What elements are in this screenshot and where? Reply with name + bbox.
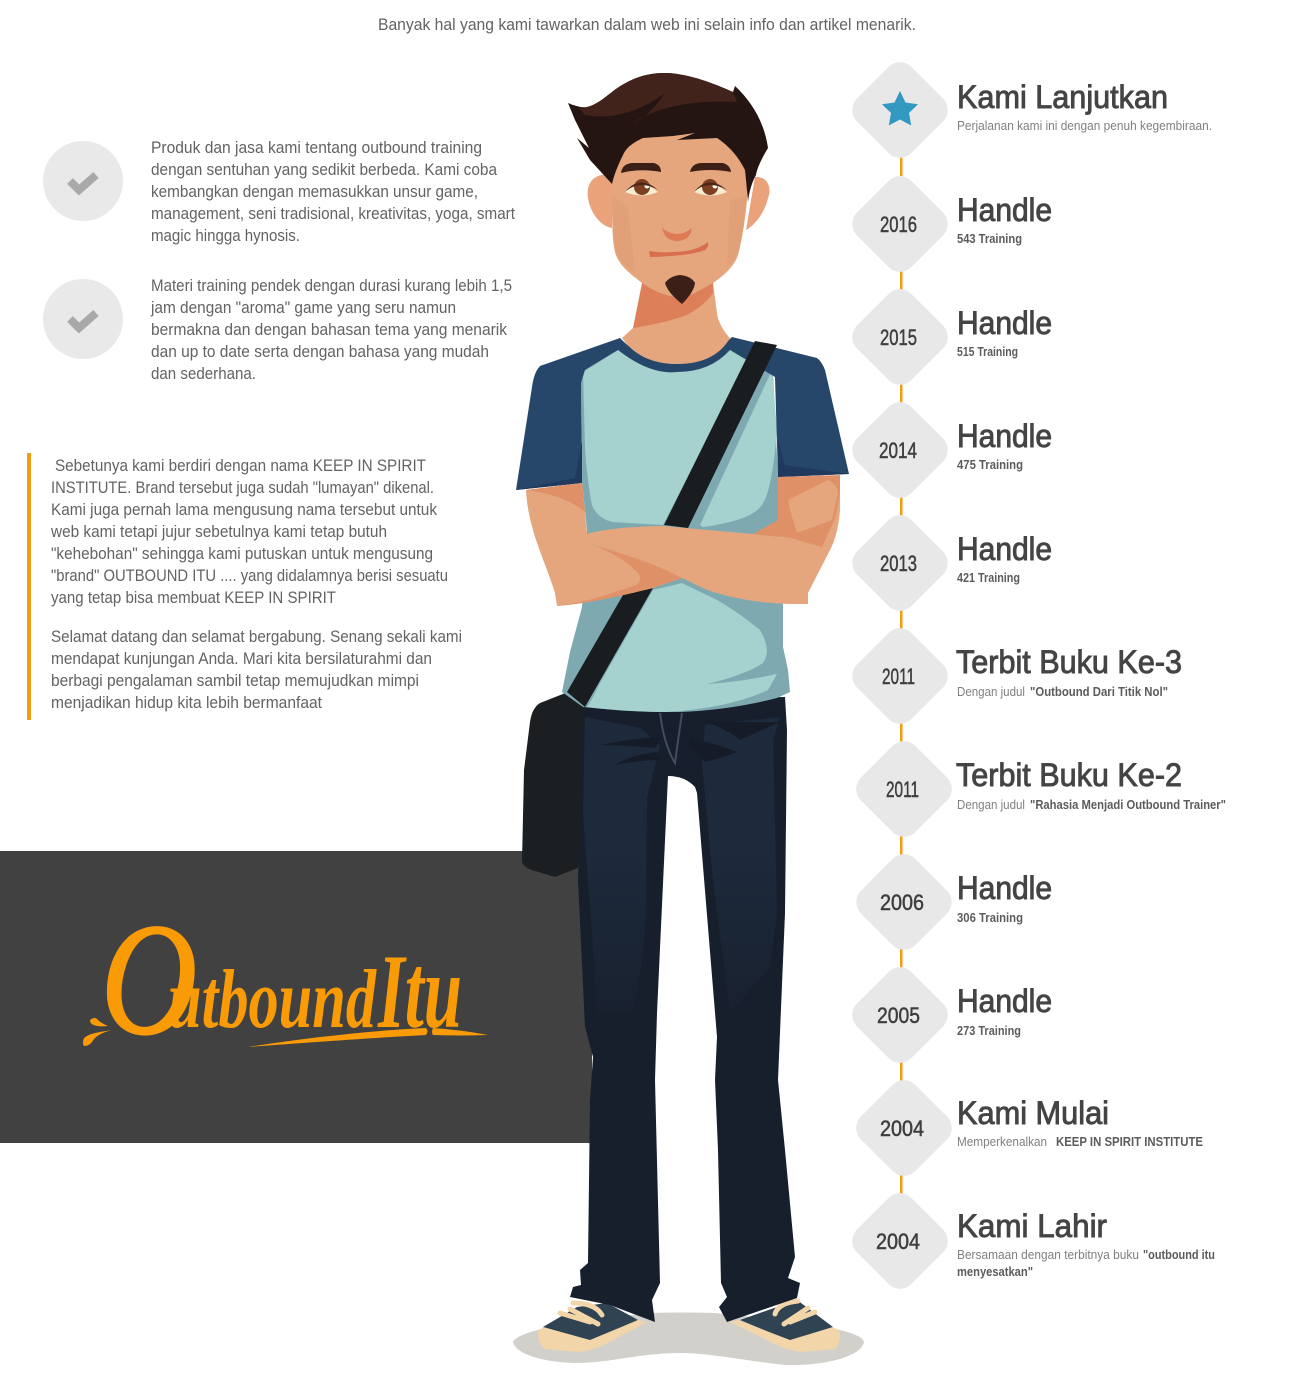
subtitle [957, 1134, 1203, 1149]
text block: history: Sebetunya kami berdiri dengan nama KEEP IN SPIRIT [55, 456, 426, 475]
logo: Outbound Itu: O [101, 890, 197, 1068]
title: Terbit Buku Ke-2 [956, 757, 1182, 793]
goatee [665, 275, 695, 304]
subtitle: menyesatkan" [957, 1265, 1033, 1279]
diamond: year 2004: 2004 [876, 1229, 920, 1254]
panel: about quote [27, 453, 462, 720]
title: Handle [957, 870, 1052, 906]
text block: history: Kami juga pernah lama mengusung nama tersebut untuk [51, 500, 437, 519]
diamond: year 2006 [850, 848, 958, 956]
title: Handle [957, 192, 1052, 228]
subtitle: KEEP IN SPIRIT INSTITUTE [1056, 1135, 1203, 1149]
panel: second service point [43, 276, 512, 383]
timeline item: Terbit Buku Ke-2 [850, 735, 1226, 843]
diamond: year 2013 [846, 509, 954, 617]
subtitle: 475 Training [957, 458, 1023, 472]
text block: product description: Produk dan jasa kami tentang outbound training [151, 138, 482, 157]
text block: welcome: berbagi pengalaman sambil tetap memujudkan mimpi [51, 671, 419, 690]
diamond: year 2014 [846, 396, 954, 504]
subtitle: 306 Training [957, 911, 1023, 925]
diamond: year 2005 [846, 961, 954, 1069]
text block: product description [151, 138, 515, 245]
jeans [570, 697, 800, 1322]
subtitle [957, 1247, 1215, 1279]
subtitle [957, 797, 1226, 812]
icon: check badge 1 [43, 141, 123, 221]
timeline item: Kami Lahir [846, 1187, 1215, 1295]
diamond: year 2006: 2006 [880, 890, 924, 915]
title: Kami Lanjutkan [957, 79, 1168, 115]
text block: welcome: menjadikan hidup kita lebih bermanfaat [51, 693, 322, 712]
text block: welcome [51, 627, 462, 712]
timeline item: 2015 [846, 283, 1052, 391]
illustration: standing man [513, 73, 864, 1365]
orange quote bar [27, 453, 31, 720]
timeline item: Kami Mulai [850, 1074, 1203, 1182]
diamond: year 2015 [846, 283, 954, 391]
ears [588, 175, 769, 230]
subtitle: 273 Training [957, 1024, 1021, 1038]
text block: training description: Materi training pendek dengan durasi kurang lebih 1,5 [151, 276, 512, 295]
title: Kami Lahir [957, 1208, 1107, 1244]
text block: history: web kami tetapi jujur sebetulnya kami tetap butuh [50, 522, 387, 541]
text block: history: "brand" OUTBOUND ITU .... yang didalamnya berisi sesuatu [51, 566, 448, 585]
subtitle: 421 Training [957, 571, 1020, 585]
face [612, 125, 747, 304]
icon: check badge 2 [43, 279, 123, 359]
text block: welcome: mendapat kunjungan Anda. Mari kita bersilaturahmi dan [51, 649, 432, 668]
shoes [538, 1300, 840, 1352]
text block: history [50, 456, 448, 607]
ground shadow [513, 1312, 864, 1365]
hair [568, 73, 768, 202]
subtitle: Memperkenalkan [957, 1134, 1047, 1149]
diamond: year 2011 [850, 735, 958, 843]
diamond: year 2013: 2013 [880, 551, 917, 576]
timeline connector line [900, 156, 902, 1194]
title: Terbit Buku Ke-3 [956, 644, 1182, 680]
subtitle: Perjalanan kami ini dengan penuh kegembiraan. [957, 118, 1212, 133]
logo: Outbound Itu: Itu [377, 933, 462, 1050]
diamond: year 2014: 2014 [879, 438, 917, 463]
subtitle: 543 Training [957, 232, 1022, 246]
text block: product description: kembangkan dengan memasukkan unsur game, [151, 182, 478, 201]
title: Handle [957, 983, 1052, 1019]
mouth [649, 242, 708, 257]
diamond: year 2005: 2005 [877, 1003, 920, 1028]
neck [622, 283, 730, 364]
diamond: year 2011 [846, 622, 954, 730]
diamond with star icon [846, 56, 954, 164]
panel: dark logo band [0, 851, 592, 1143]
text block: product description: dengan sentuhan yang sedikit berbeda. Kami coba [151, 160, 497, 179]
logo: Outbound Itu [83, 890, 488, 1068]
title: Handle [957, 418, 1052, 454]
diamond: year 2011: 2011 [882, 664, 915, 689]
eyes [625, 184, 658, 196]
text block: product description: magic hingga hynosis. [151, 226, 300, 245]
subtitle: "Outbound Dari Titik Nol" [1030, 685, 1168, 699]
subtitle: Dengan judul [957, 797, 1025, 812]
timeline item: 2016 [846, 170, 1052, 278]
diamond: year 2016: 2016 [880, 212, 917, 237]
text block: product description: management, seni tradisional, kreativitas, yoga, smart [151, 204, 515, 223]
text block: welcome: Selamat datang dan selamat bergabung. Senang sekali kami [51, 627, 462, 646]
crossbody strap [567, 341, 777, 707]
text block: history: "kehebohan" sehingga kami putuskan untuk mengusung [51, 544, 433, 563]
subtitle: "outbound itu [1143, 1248, 1215, 1262]
text block: training description [150, 276, 512, 383]
crossed arms [526, 475, 840, 606]
text block: training description: dan sederhana. [151, 364, 256, 383]
timeline item: 2006 [850, 848, 1052, 956]
timeline item: Kami Lanjutkan [846, 56, 1212, 164]
text block: history: INSTITUTE. Brand tersebut juga sudah "lumayan" dikenal. [51, 478, 434, 497]
subtitle: "Rahasia Menjadi Outbound Trainer" [1030, 798, 1226, 812]
diamond: year 2004 [846, 1187, 954, 1295]
diamond: year 2011: 2011 [886, 777, 919, 802]
timeline item: Terbit Buku Ke-3 [846, 622, 1182, 730]
subtitle: Dengan judul [957, 684, 1025, 699]
diamond: year 2015: 2015 [880, 325, 917, 350]
text block: training description: dan up to date serta dengan bahasa yang mudah [151, 342, 489, 361]
shoulder bag [522, 692, 590, 877]
diamond: year 2004 [850, 1074, 958, 1182]
logo: Outbound Itu: utbound [168, 953, 377, 1046]
diamond: year 2004: 2004 [880, 1116, 924, 1141]
title: Handle [957, 305, 1052, 341]
subtitle: 515 Training [957, 345, 1018, 359]
panel: first service point [43, 138, 515, 245]
intro heading: Banyak hal yang kami tawarkan dalam web ini selain info dan artikel menarik. [378, 15, 916, 34]
title: Handle [957, 531, 1052, 567]
subtitle [957, 684, 1168, 699]
text block: training description: bermakna dan dengan bahasan tema yang menarik [151, 320, 507, 339]
text block: training description: jam dengan "aroma" game yang seru namun [150, 298, 456, 317]
diamond: year 2016 [846, 170, 954, 278]
text block: history: yang tetap bisa membuat KEEP IN SPIRIT [51, 588, 336, 607]
nose [662, 228, 692, 241]
title: Kami Mulai [957, 1095, 1109, 1131]
subtitle: Bersamaan dengan terbitnya buku [957, 1247, 1139, 1262]
timeline item: 2005 [846, 961, 1052, 1069]
t-shirt [516, 337, 849, 712]
timeline item: 2013 [846, 509, 1052, 617]
timeline item: 2014 [846, 396, 1052, 504]
eyebrows [621, 163, 731, 173]
